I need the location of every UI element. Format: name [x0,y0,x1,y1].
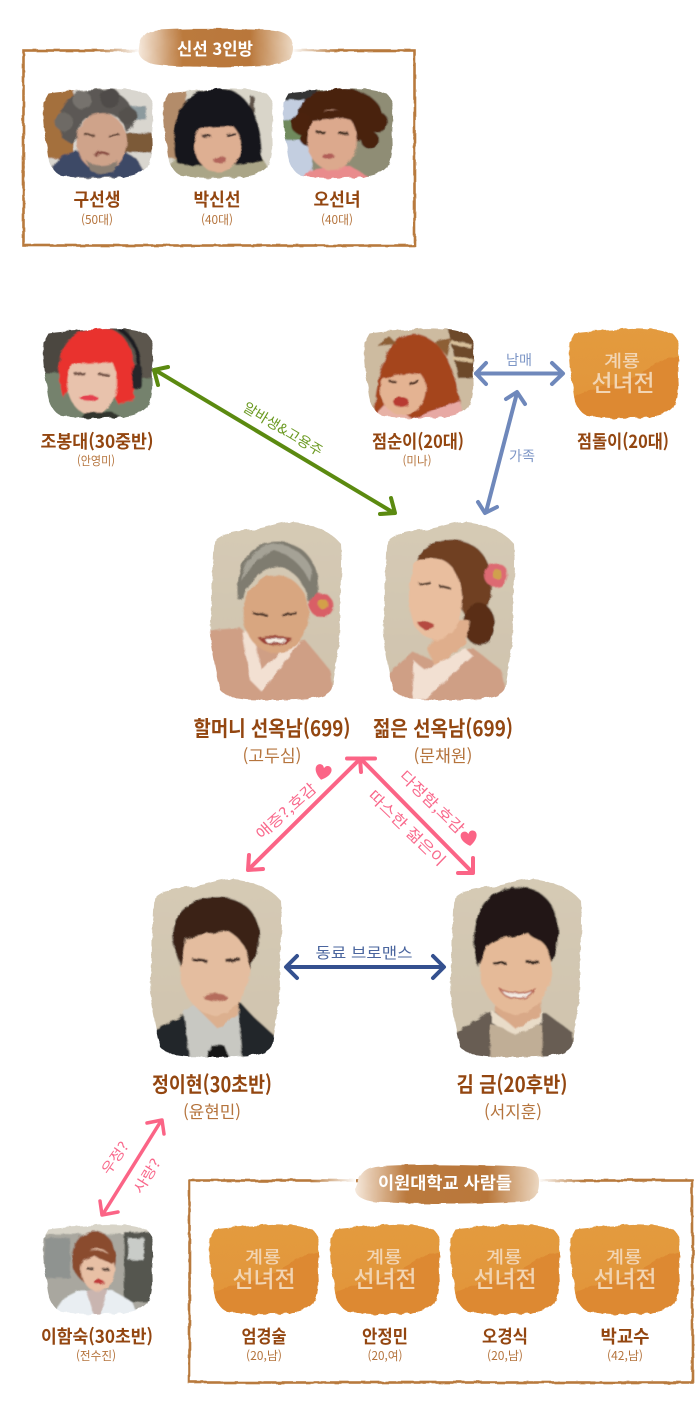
placeholder logo card: 계룡 선녀전 [329,1224,442,1315]
actor: 고두심: (고두심) [242,742,302,767]
age: 구선생: (50대) [81,211,113,228]
placeholder logo card: 계룡 선녀전: 선녀전 [594,1260,656,1294]
portrait: 젊은 선옥남 [383,520,517,702]
placeholder logo card: 계룡 선녀전 [568,328,681,419]
icon: heart [313,763,332,782]
arrow: 가족 [478,392,535,513]
age and gender: 오경식: (20,남) [487,1347,523,1364]
placeholder logo card: 계룡 선녀전: 선녀전 [232,1260,296,1294]
card: 오선녀 [282,88,394,228]
portrait: 김 금 [450,877,584,1059]
placeholder logo card: 계룡 선녀전: 선녀전 [474,1260,536,1294]
name: 조봉대: 조봉대(30중반) [40,428,154,454]
actor: 문채원: (문채원) [414,742,472,767]
arrow: 동료 브로맨스: 동료 브로맨스 [316,942,413,963]
age and gender: 엄경술: (20,남) [246,1347,282,1364]
name: 오경식: 오경식 [482,1323,528,1349]
heading banner: 신선 3인방: 신선 3인방 [177,35,253,60]
arrow: 가족: 가족 [509,446,535,466]
age and gender: 박교수: (42,남) [607,1347,643,1364]
card: 김 금 [450,877,584,1123]
actor: 윤현민: (윤현민) [183,1098,241,1123]
icon: heart [460,830,478,847]
card: 안정민 [329,1224,442,1364]
name: 오선녀: 오선녀 [314,186,360,212]
placeholder logo card: 계룡 선녀전: 계룡 [604,347,640,372]
card: 박신선 [162,88,274,228]
actor: 전수진: (전수진) [76,1347,116,1364]
name: 김 금: 김 금(20후반) [456,1069,568,1099]
actor: 안영미: (안영미) [77,452,115,469]
name: 이함숙: 이함숙(30초반) [41,1323,153,1349]
card: 점순이 [363,328,475,469]
placeholder logo card: 계룡 선녀전 [569,1224,682,1315]
arrow: 남매: 남매 [506,350,532,370]
portrait: 오선녀 [282,88,394,179]
arrow: 우정? 사랑?: 사랑? [128,1155,166,1197]
age: 오선녀: (40대) [321,211,353,228]
name: 박교수: 박교수 [600,1323,650,1349]
name: 점순이: 점순이(20대) [372,428,464,454]
card: 할머니 선옥남 [194,520,350,767]
name: 정이현: 정이현(30초반) [152,1069,272,1099]
portrait: 구선생 [42,88,154,179]
arrow: 우정? 사랑? [96,1120,166,1215]
placeholder logo card: 계룡 선녀전: 계룡 [366,1243,402,1268]
placeholder logo card: 계룡 선녀전: 계룡 [245,1243,281,1268]
age: 박신선: (40대) [201,211,233,228]
heading banner: 신선 3인방 [139,29,293,67]
portrait: 박신선 [162,88,274,179]
name: 젊은 선옥남: 젊은 선옥남(699) [373,713,513,743]
panel: 신선 3인방 [24,29,414,245]
arrow: 알바생&고용주 [154,367,395,514]
arrow: 애증?,호감: 애증?,호감 [251,778,321,844]
card: 오경식 [449,1224,562,1364]
card: 이함숙 [41,1224,154,1364]
card: 엄경술 [208,1224,321,1364]
arrow: 다정함,호감 · 따스한 젊은이 [361,758,478,873]
placeholder logo card: 계룡 선녀전: 선녀전 [592,364,654,398]
portrait: 점순이 [363,328,475,419]
portrait: 이함숙 [42,1224,154,1315]
arrow: 다정함,호감 · 따스한 젊은이: 따스한 젊은이 [363,785,451,871]
card: 구선생 [42,88,154,228]
placeholder logo card: 계룡 선녀전: 계룡 [486,1243,522,1268]
name: 안정민: 안정민 [362,1323,408,1349]
portrait: 조봉대 [42,328,154,419]
portrait: 정이현 [150,877,284,1059]
card: 조봉대 [40,328,154,469]
card: 점돌이 [568,328,681,454]
card: 박교수 [569,1224,682,1364]
placeholder logo card: 계룡 선녀전 [208,1224,321,1315]
arrow: 남매 [476,350,563,384]
name: 구선생: 구선생 [74,186,120,212]
heading banner: 이원대학교 사람들 [355,1165,539,1204]
card: 젊은 선옥남 [373,520,517,767]
arrow: 동료 브로맨스 [286,942,444,978]
placeholder logo card: 계룡 선녀전: 계룡 [606,1243,642,1268]
name: 엄경술: 엄경술 [242,1323,286,1349]
placeholder logo card: 계룡 선녀전: 선녀전 [354,1260,416,1294]
arrow: 우정? 사랑?: 우정? [96,1138,134,1178]
heading banner: 이원대학교 사람들: 이원대학교 사람들 [378,1169,512,1194]
arrow: 애증?,호감 [248,758,361,870]
placeholder logo card: 계룡 선녀전 [449,1224,562,1315]
portrait: 할머니 선옥남 [210,520,344,702]
arrow: 알바생&고용주: 알바생&고용주 [239,397,327,461]
panel: 이원대학교 사람들 [190,1165,692,1382]
name: 박신선: 박신선 [194,186,240,212]
actor: 미나: (미나) [402,452,432,469]
arrow: 다정함,호감 · 따스한 젊은이: 다정함,호감 [395,766,469,839]
age and gender: 안정민: (20,여) [368,1347,402,1364]
card: 정이현 [150,877,284,1123]
name: 할머니 선옥남: 할머니 선옥남(699) [194,713,350,743]
name: 점돌이: 점돌이(20대) [577,428,669,454]
actor: 서지훈: (서지훈) [484,1098,542,1123]
